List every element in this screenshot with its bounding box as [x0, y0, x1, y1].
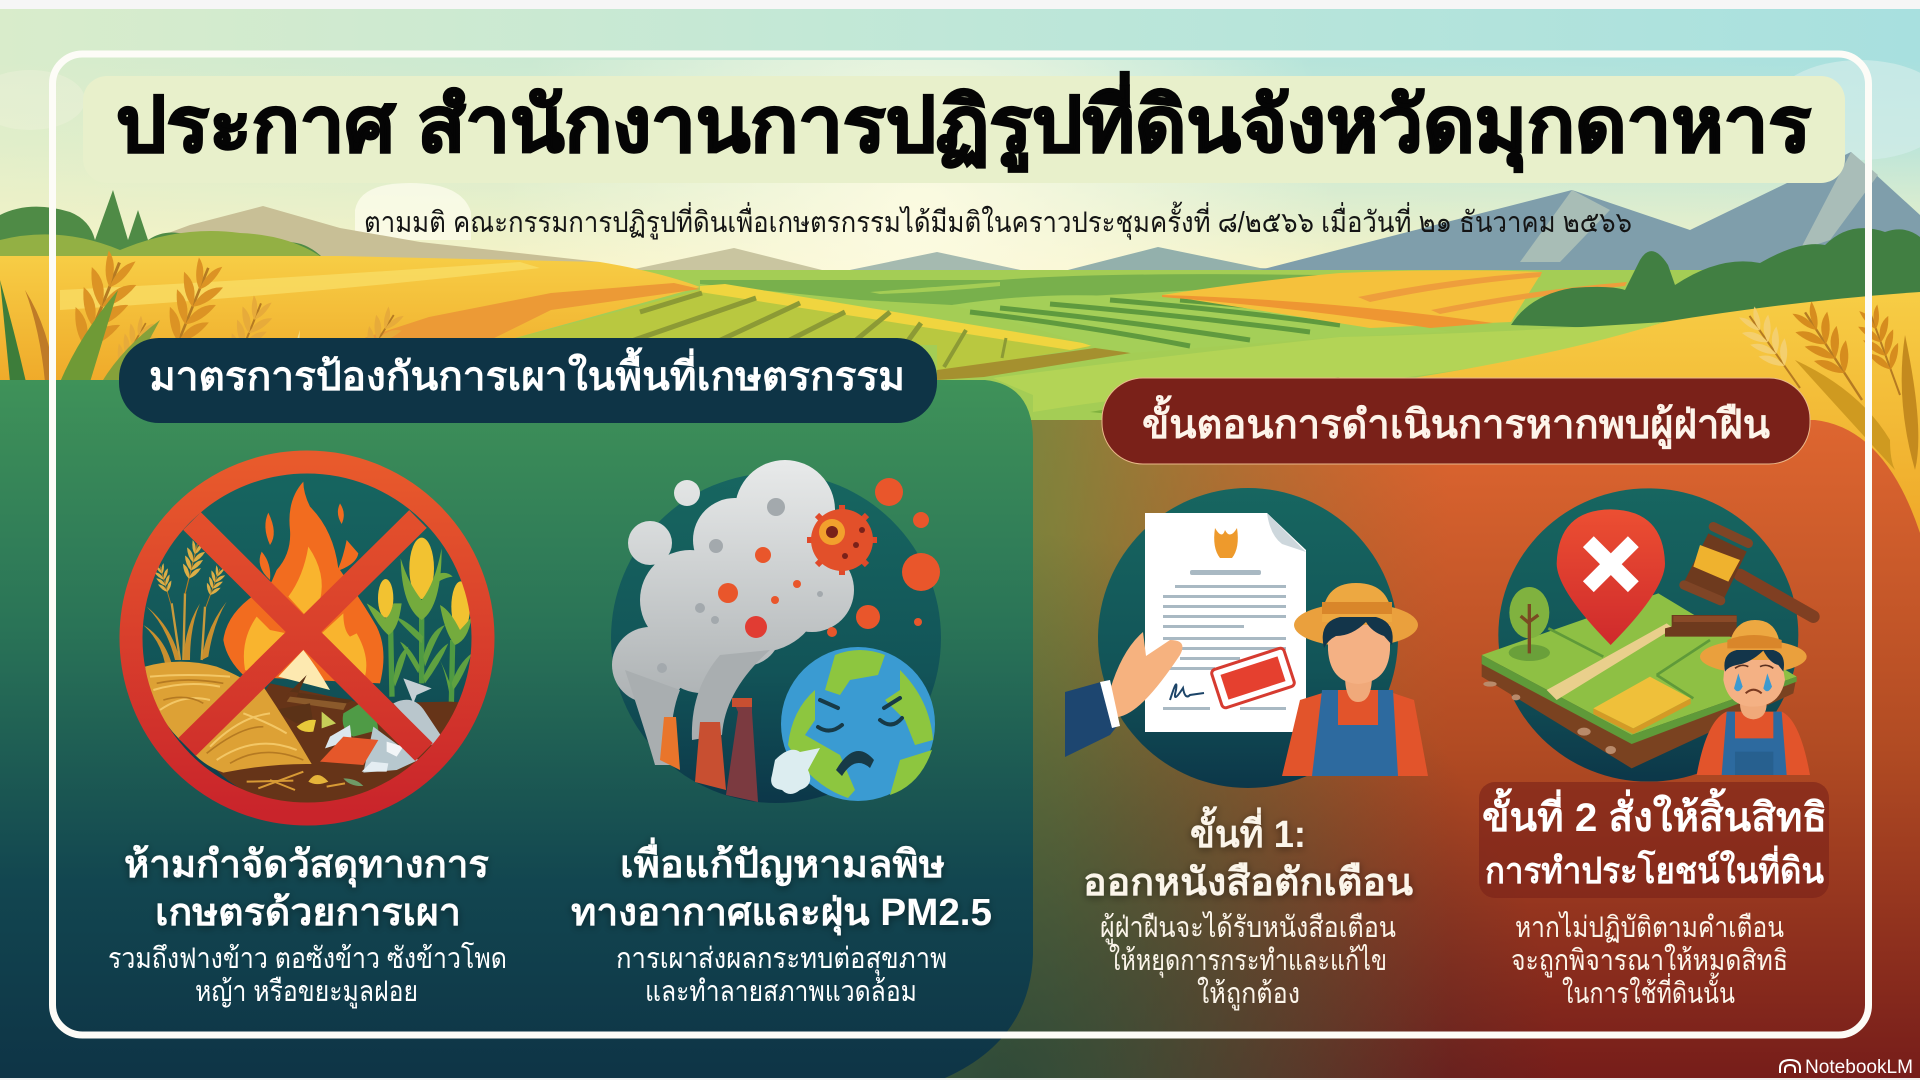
detail: step 2: ในการใช้ที่ดินนั้น — [1562, 972, 1735, 1010]
detail: pollution: การเผาส่งผลกระทบต่อสุขภาพ — [616, 943, 947, 976]
icon: land rights revocation, pin, gavel and crying farmer — [1482, 488, 1813, 782]
burning logs — [273, 675, 353, 732]
right section heading pill — [1102, 378, 1810, 464]
heading: pollution — [571, 837, 992, 936]
heading: step 2: ขั้นที่ 2 สั่งให้สิ้นสิทธิ — [1482, 788, 1827, 840]
heading: pollution: เพื่อแก้ปัญหามลพิษ — [620, 837, 945, 886]
sad earth — [781, 647, 935, 801]
smoke cloud — [612, 460, 855, 765]
detail: step 2: หากไม่ปฏิบัติตามคำเตือน — [1515, 910, 1784, 944]
icon: air pollution, smoke and sad earth — [611, 460, 941, 803]
right section heading pill: ขั้นตอนการดำเนินการหากพบผู้ฝ่าฝืน — [1142, 395, 1770, 449]
NotebookLM watermark: NotebookLM — [1805, 1057, 1913, 1078]
icon: no burning prohibition sign — [131, 462, 483, 814]
wheat stalks — [143, 539, 227, 663]
tree — [1509, 587, 1550, 661]
waste and debris — [247, 678, 442, 790]
detail: pollution: และทำลายสภาพแวดล้อม — [645, 976, 917, 1008]
text block: pollution — [571, 837, 992, 1008]
title banner — [83, 71, 1845, 183]
red map pin with X — [1557, 509, 1665, 645]
text block: step 2 — [1482, 788, 1827, 1010]
text block: step 1 — [1083, 806, 1413, 1011]
step 2 heading backdrop — [1479, 782, 1829, 898]
panel background: right section (orange to dark red) — [900, 420, 1920, 1078]
detail: step 1: ให้ถูกต้อง — [1197, 976, 1300, 1011]
crying farmer — [1697, 620, 1810, 775]
corn plants — [367, 538, 472, 705]
soil ground — [216, 683, 458, 802]
farmer — [1282, 583, 1428, 776]
heading: no burning: เกษตรด้วยการเผา — [155, 892, 461, 934]
detail: no burning: หญ้า หรือขยะมูลฝอย — [195, 976, 418, 1009]
detail: step 1: ให้หยุดการกระทำและแก้ไข — [1109, 943, 1387, 978]
detail: step 2: จะถูกพิจารณาให้หมดสิทธิ — [1511, 943, 1788, 978]
detail: pollution — [616, 943, 947, 1008]
title text: ประกาศ สำนักงานการปฏิรูปที่ดินจังหวัดมุกดาหาร — [116, 71, 1811, 173]
heading: step 2 — [1482, 788, 1827, 891]
prohibition ring and cross — [131, 462, 483, 814]
panel background: left section (green to navy) — [0, 380, 1033, 1078]
document — [1145, 513, 1306, 732]
soil base and land plot — [1482, 593, 1797, 768]
gavel — [1665, 527, 1813, 637]
detail: no burning — [108, 941, 507, 1009]
heading: pollution: ทางอากาศและฝุ่น PM2.5 — [571, 892, 992, 936]
heading: step 1: ออกหนังสือตักเตือน — [1083, 862, 1413, 904]
detail: step 2 — [1511, 910, 1788, 1010]
heading: step 1 — [1083, 806, 1413, 904]
virus — [807, 505, 877, 575]
detail: step 1 — [1100, 910, 1396, 1011]
left section heading pill: มาตรการป้องกันการเผาในพื้นที่เกษตรกรรม — [149, 347, 905, 399]
signature — [1170, 684, 1204, 700]
heading: step 2: การทำประโยชน์ในที่ดิน — [1485, 845, 1824, 891]
subtitle: ตามมติ คณะกรรมการปฏิรูปที่ดินเพื่อเกษตรกรรมได้มีมติในคราวประชุมครั้งที่ ๘/๒๕๖๖ เมื่อวันที่ ๒๑ ธันวาคม ๒๕๖๖ — [364, 201, 1632, 240]
hand with sleeve — [1065, 632, 1182, 757]
straw pile — [145, 662, 312, 773]
icon: warning letter, hand and farmer — [1065, 488, 1428, 788]
red stamp — [1211, 647, 1295, 709]
text block: no burning — [108, 844, 507, 1009]
pollution particles — [718, 478, 940, 638]
flames — [223, 482, 383, 690]
heading: step 1: ขั้นที่ 1: — [1190, 806, 1306, 856]
detail: no burning: รวมถึงฟางข้าว ตอซังข้าว ซังข้าวโพด — [108, 941, 507, 975]
heading: no burning: ห้ามกำจัดวัสดุทางการ — [124, 844, 490, 888]
detail: step 1: ผู้ฝ่าฝืนจะได้รับหนังสือเตือน — [1100, 910, 1396, 945]
factory chimneys — [660, 698, 758, 802]
heading: no burning — [124, 844, 490, 934]
background: sky and farmland landscape — [0, 9, 1920, 560]
breath puff — [771, 748, 820, 794]
left section heading pill — [119, 338, 937, 423]
